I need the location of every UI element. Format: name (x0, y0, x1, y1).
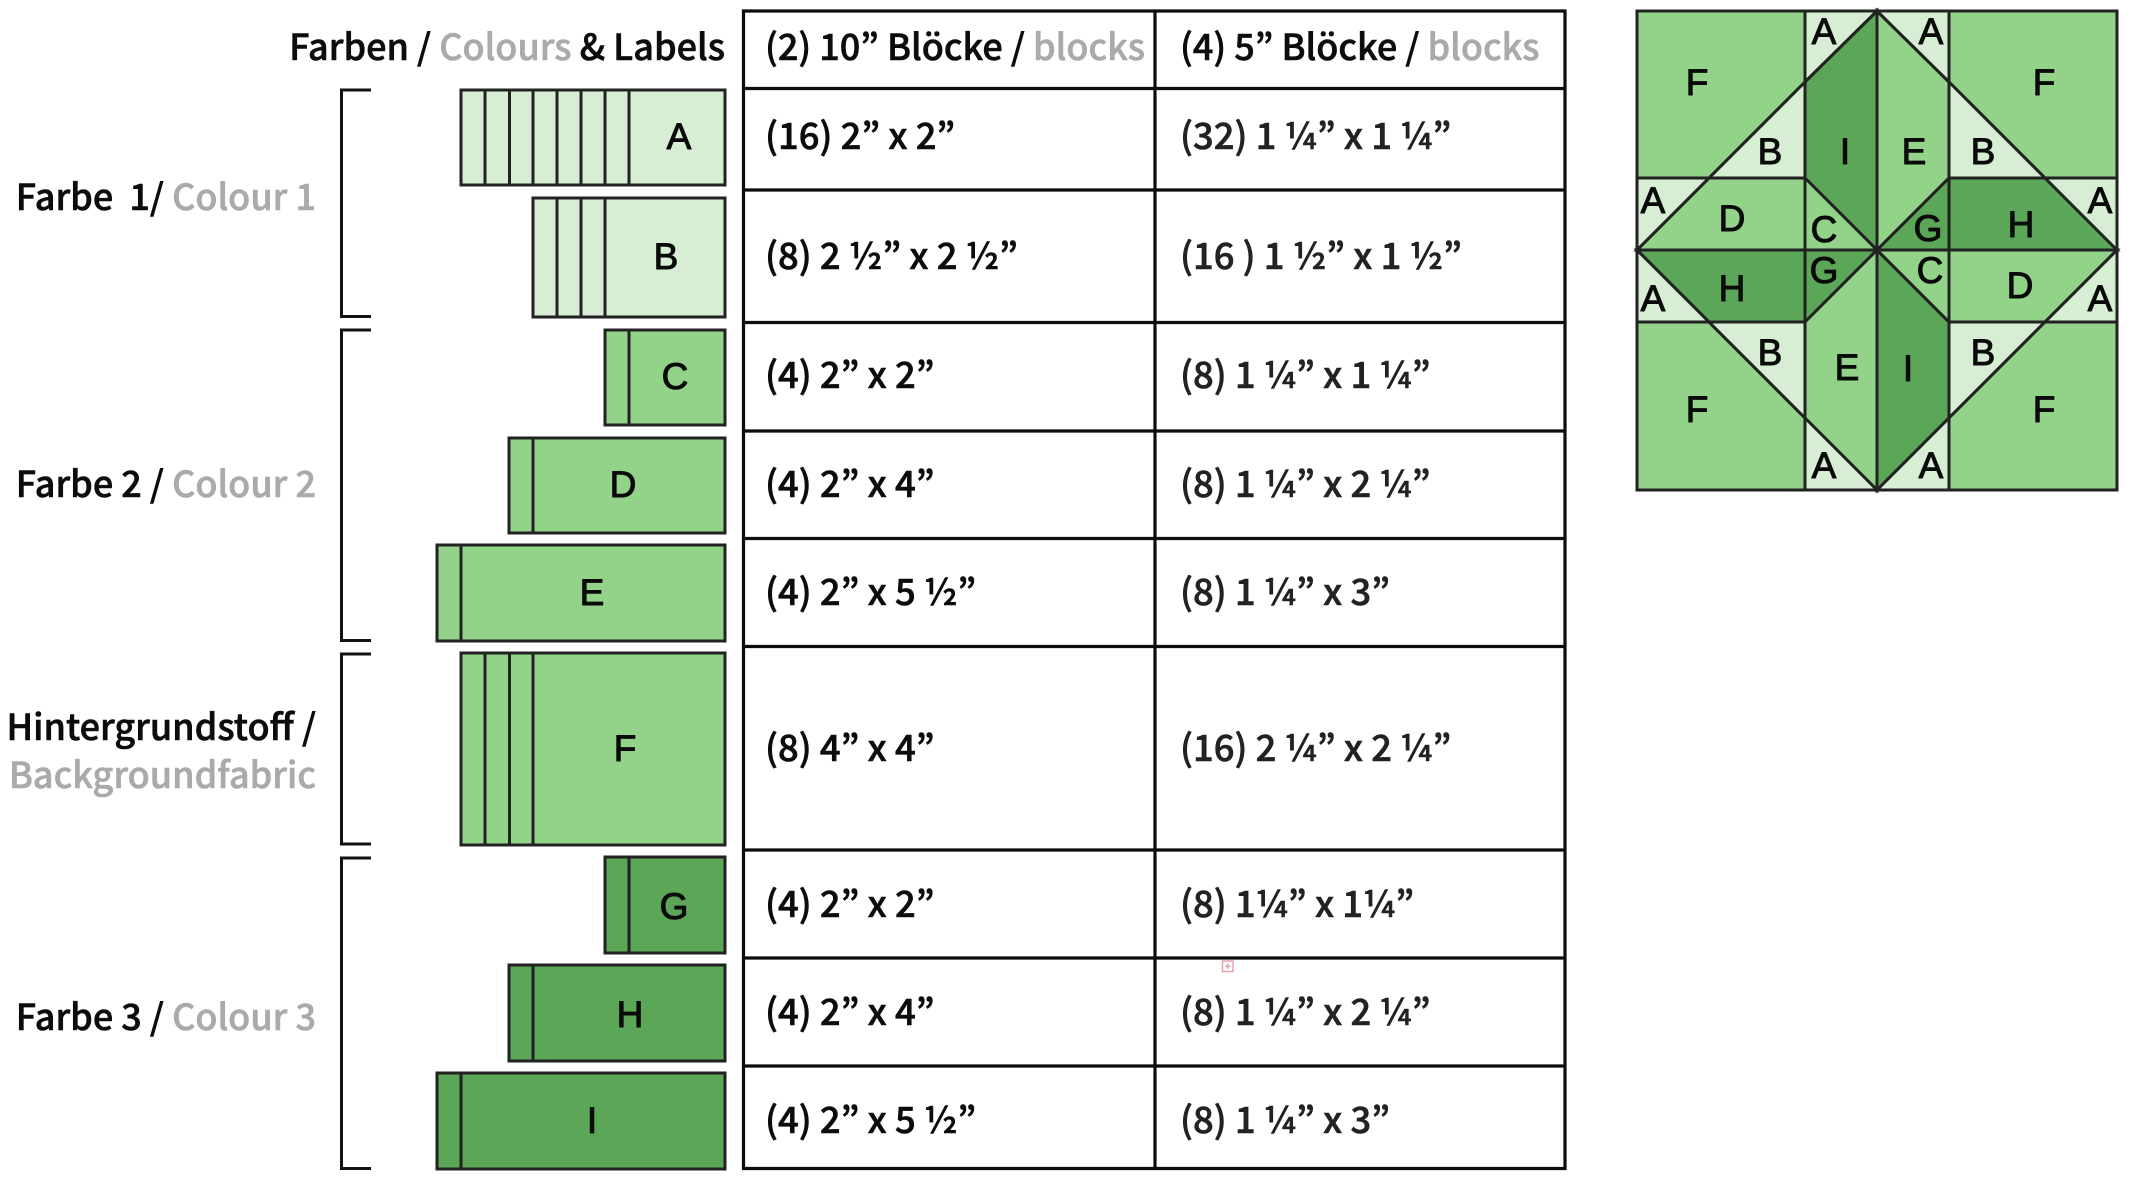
swatch stack: B: B (654, 236, 678, 277)
swatch stack: A (461, 90, 725, 185)
quilt block diagram: E (1902, 131, 1926, 172)
quilt block diagram: A (1641, 180, 1666, 221)
column: 5 inch cuts: (16) 2 ¼” x 2 ¼” (1180, 720, 1451, 772)
quilt block diagram: G (1810, 250, 1838, 291)
swatch stack: H (509, 965, 725, 1061)
swatch stack: D (509, 438, 725, 533)
quilt block diagram: F (2033, 389, 2055, 430)
column: 5 inch cuts: (32) 1 ¼” x 1 ¼” (1180, 108, 1451, 160)
group label: colour 1: Farbe 1/ Colour 1 (16, 169, 316, 221)
column: 5 inch cuts: (8) 1 ¼” x 2 ¼” (1180, 984, 1431, 1036)
swatch stack: E: E (580, 572, 604, 613)
group label: background fabric: Backgroundfabric (9, 747, 316, 799)
bracket: colour 1 (342, 90, 371, 316)
icon: small red anchor marker (1222, 961, 1233, 972)
swatch stack: C (605, 330, 725, 425)
quilt block diagram: A (1641, 278, 1666, 319)
quilt block diagram: C (1917, 250, 1943, 291)
cutting table grid (744, 11, 1565, 1168)
quilt block diagram: G (1914, 208, 1942, 249)
table header: 10 inch blocks: (2) 10” Blöcke / blocks (765, 19, 1145, 71)
table header: 5 inch blocks: (4) 5” Blöcke / blocks (1180, 19, 1540, 71)
quilt block diagram: H (1719, 268, 1745, 309)
quilt block diagram: B (1758, 332, 1782, 373)
quilt block diagram: F (2033, 62, 2055, 103)
quilt block diagram: D (1719, 198, 1745, 239)
column: 5 inch cuts: (8) 1 ¼” x 1 ¼” (1180, 347, 1431, 399)
swatch stack: G: G (660, 886, 688, 927)
swatch stack: A: A (667, 116, 692, 157)
column: 10 inch cuts: (16) 2” x 2” (765, 108, 955, 160)
quilt block diagram: B (1758, 131, 1782, 172)
swatch stack: E (437, 545, 725, 641)
group label: background fabric (6, 699, 316, 799)
quilt block diagram: A (2088, 180, 2113, 221)
quilt block diagram: B (1971, 131, 1995, 172)
group label: colour 3: Farbe 3 / Colour 3 (16, 989, 316, 1041)
quilt block diagram: E (1835, 347, 1859, 388)
quilt block diagram: H (2008, 204, 2034, 245)
quilt block diagram: F (1686, 389, 1708, 430)
swatch stack: G (605, 857, 725, 953)
column: 10 inch cuts: (4) 2” x 2” (765, 876, 935, 928)
column: 10 inch cuts: (8) 2 ½” x 2 ½” (765, 228, 1018, 280)
quilt block diagram: A (1919, 11, 1944, 52)
quilt block diagram: A (1812, 445, 1837, 486)
column: 5 inch cuts: (8) 1 ¼” x 3” (1180, 564, 1390, 616)
column: 5 inch cuts (1180, 108, 1462, 1144)
column: 5 inch cuts: (8) 1¼” x 1¼” (1180, 876, 1414, 928)
quilt block diagram: D (2007, 265, 2033, 306)
swatch stack: B (533, 198, 725, 317)
bracket: colour 3 (342, 858, 371, 1168)
column: 5 inch cuts: (16 ) 1 ½” x 1 ½” (1180, 228, 1462, 280)
quilt block diagram: A (1812, 11, 1837, 52)
quilt block diagram: A (1919, 445, 1944, 486)
swatch stack: H: H (617, 994, 643, 1035)
column: 10 inch cuts: (4) 2” x 4” (765, 984, 935, 1036)
column: 10 inch cuts: (4) 2” x 5 ½” (765, 564, 976, 616)
quilt block diagram: I (1903, 348, 1913, 389)
heading: colours and labels: Farben / Colours & Labels (289, 19, 725, 71)
swatch stack: I (437, 1073, 725, 1169)
quilt block diagram (1637, 11, 2117, 490)
quilt block diagram: F (1686, 62, 1708, 103)
quilt block diagram: C (1811, 209, 1837, 250)
group label: background fabric: Hintergrundstoff / (6, 699, 316, 751)
column: 10 inch cuts: (4) 2” x 4” (765, 456, 935, 508)
swatch stack: C: C (662, 356, 688, 397)
bracket: background fabric (342, 654, 371, 844)
column: 5 inch cuts: (8) 1 ¼” x 3” (1180, 1092, 1390, 1144)
column: 10 inch cuts (765, 108, 1018, 1144)
group label: colour 2: Farbe 2 / Colour 2 (16, 456, 316, 508)
column: 10 inch cuts: (8) 4” x 4” (765, 720, 935, 772)
quilt block diagram: B (1971, 332, 1995, 373)
swatch stack: F: F (614, 728, 636, 769)
column: 10 inch cuts: (4) 2” x 2” (765, 347, 935, 399)
quilt block diagram: I (1840, 131, 1850, 172)
column: 5 inch cuts: (8) 1 ¼” x 2 ¼” (1180, 456, 1431, 508)
bracket: colour 2 (342, 330, 371, 640)
swatch stack: I: I (587, 1100, 597, 1141)
swatch stack: D: D (610, 464, 636, 505)
column: 10 inch cuts: (4) 2” x 5 ½” (765, 1092, 976, 1144)
swatch stack: F (461, 653, 725, 845)
quilt block diagram: A (2088, 278, 2113, 319)
